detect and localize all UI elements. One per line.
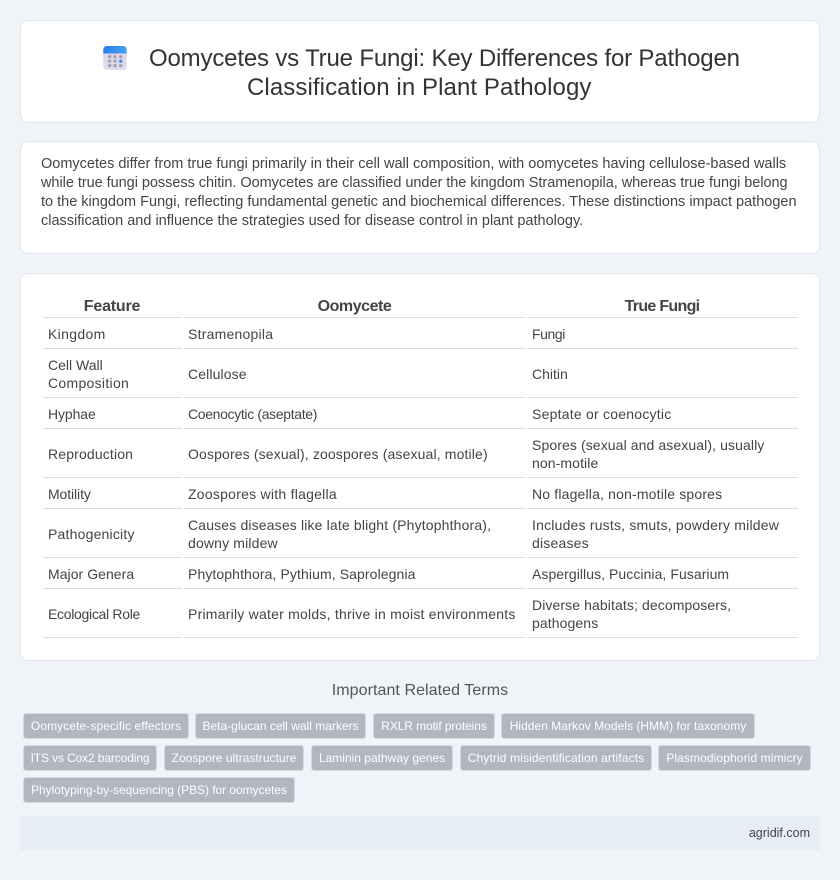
icon: calendar grid	[103, 46, 127, 70]
text: Chitin	[532, 366, 568, 382]
row: Ecological Role: Ecological Role	[48, 606, 140, 622]
header panel	[20, 20, 820, 123]
row: Motility: Motility	[48, 486, 91, 502]
tag group: related terms	[23, 713, 811, 803]
row: Cell Wall Composition: Composition	[48, 375, 129, 391]
tag: Chytrid misidentification artifacts	[468, 751, 644, 765]
tag	[195, 713, 366, 739]
row: Hyphae: Hyphae	[48, 406, 96, 422]
tag: Oomycete-specific effectors	[31, 719, 181, 733]
title: Classification in Plant Pathology	[247, 74, 592, 101]
text: Zoospores with flagella	[188, 486, 337, 502]
text: Spores (sexual and asexual), usually	[532, 437, 764, 453]
title	[149, 45, 740, 101]
tag	[311, 745, 453, 771]
column heading: Feature: Feature	[84, 298, 140, 315]
footer bar	[20, 816, 820, 850]
tag: Zoospore ultrastructure	[172, 751, 296, 765]
footer text: agridif.com	[749, 826, 810, 840]
tag	[460, 745, 652, 771]
panel: comparison table	[20, 273, 820, 661]
intro text: classification and influence the strategies used for disease control in plant pathology.	[41, 213, 583, 229]
text: Includes rusts, smuts, powdery mildew	[532, 517, 779, 533]
tag: Hidden Markov Models (HMM) for taxonomy	[510, 719, 746, 733]
text: No flagella, non-motile spores	[532, 486, 722, 502]
text: Septate or coenocytic	[532, 406, 671, 422]
tag	[501, 713, 755, 739]
heading: related terms: Important Related Terms	[332, 682, 508, 699]
text: Primarily water molds, thrive in moist environments	[188, 606, 516, 622]
tag: RXLR motif proteins	[381, 719, 487, 733]
text: Phytophthora, Pythium, Saprolegnia	[188, 566, 416, 582]
tag	[658, 745, 811, 771]
text: Oospores (sexual), zoospores (asexual, motile)	[188, 446, 488, 462]
panel: introduction	[20, 141, 820, 254]
text: Fungi	[532, 326, 565, 342]
row: Reproduction: Reproduction	[48, 446, 133, 462]
intro text: while true fungi possess chitin. Oomycetes are classified under the kingdom Stramenopila, whereas true fungi belong	[41, 175, 788, 191]
tag: ITS vs Cox2 barcoding	[31, 751, 149, 765]
column heading: Oomycete: Oomycete	[318, 298, 391, 315]
text: diseases	[532, 535, 589, 551]
tag: Laminin pathway genes	[319, 751, 445, 765]
row: Cell Wall Composition: Cell Wall	[48, 357, 103, 373]
tag	[23, 713, 189, 739]
tag	[164, 745, 304, 771]
intro text	[41, 156, 797, 229]
text: downy mildew	[188, 535, 278, 551]
text: Stramenopila	[188, 326, 273, 342]
tag	[23, 745, 157, 771]
text: Coenocytic (aseptate)	[188, 406, 317, 422]
column heading: True Fungi: True Fungi	[625, 298, 699, 315]
row: Pathogenicity: Pathogenicity	[48, 526, 135, 542]
tag: Beta-glucan cell wall markers	[202, 719, 359, 733]
intro text: Oomycetes differ from true fungi primarily in their cell wall composition, with oomycetes having cellulose-based walls	[41, 156, 786, 172]
tag: Plasmodiophorid mimicry	[666, 751, 803, 765]
row: Major Genera: Major Genera	[48, 566, 134, 582]
text: Diverse habitats; decomposers,	[532, 597, 731, 613]
tag	[373, 713, 495, 739]
tag: Phylotyping-by-sequencing (PBS) for oomycetes	[31, 783, 287, 797]
row: Kingdom: Kingdom	[48, 326, 106, 342]
text: Causes diseases like late blight (Phytophthora),	[188, 517, 491, 533]
tag	[23, 777, 295, 803]
intro text: to the kingdom Fungi, reflecting fundamental genetic and biochemical differences. These distinctions impact pathogen	[41, 194, 797, 210]
text: non-motile	[532, 455, 598, 471]
text: Aspergillus, Puccinia, Fusarium	[532, 566, 729, 582]
title: Oomycetes vs True Fungi: Key Differences for Pathogen	[149, 45, 740, 72]
text: pathogens	[532, 615, 598, 631]
text: Cellulose	[188, 366, 247, 382]
row: Cell Wall Composition	[48, 357, 129, 391]
